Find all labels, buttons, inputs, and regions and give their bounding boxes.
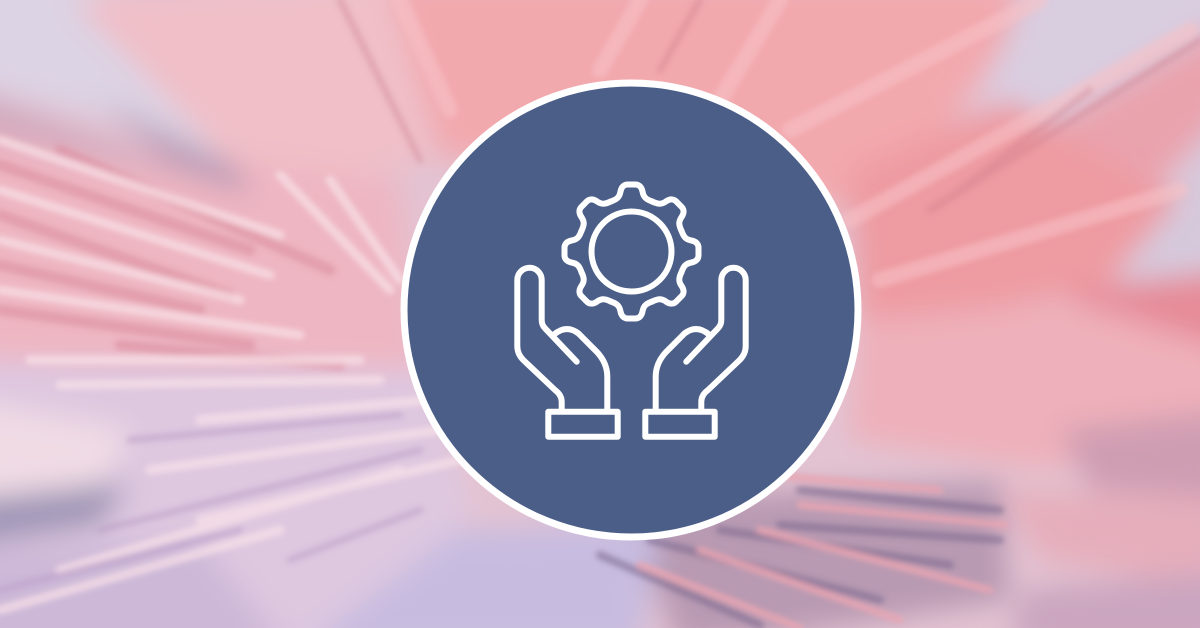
icon: hands holding gear <box>517 184 746 437</box>
badge: circle <box>404 83 858 537</box>
icon: left hand <box>517 268 618 437</box>
icon: right hand <box>645 268 746 437</box>
icon: gear <box>564 184 698 318</box>
